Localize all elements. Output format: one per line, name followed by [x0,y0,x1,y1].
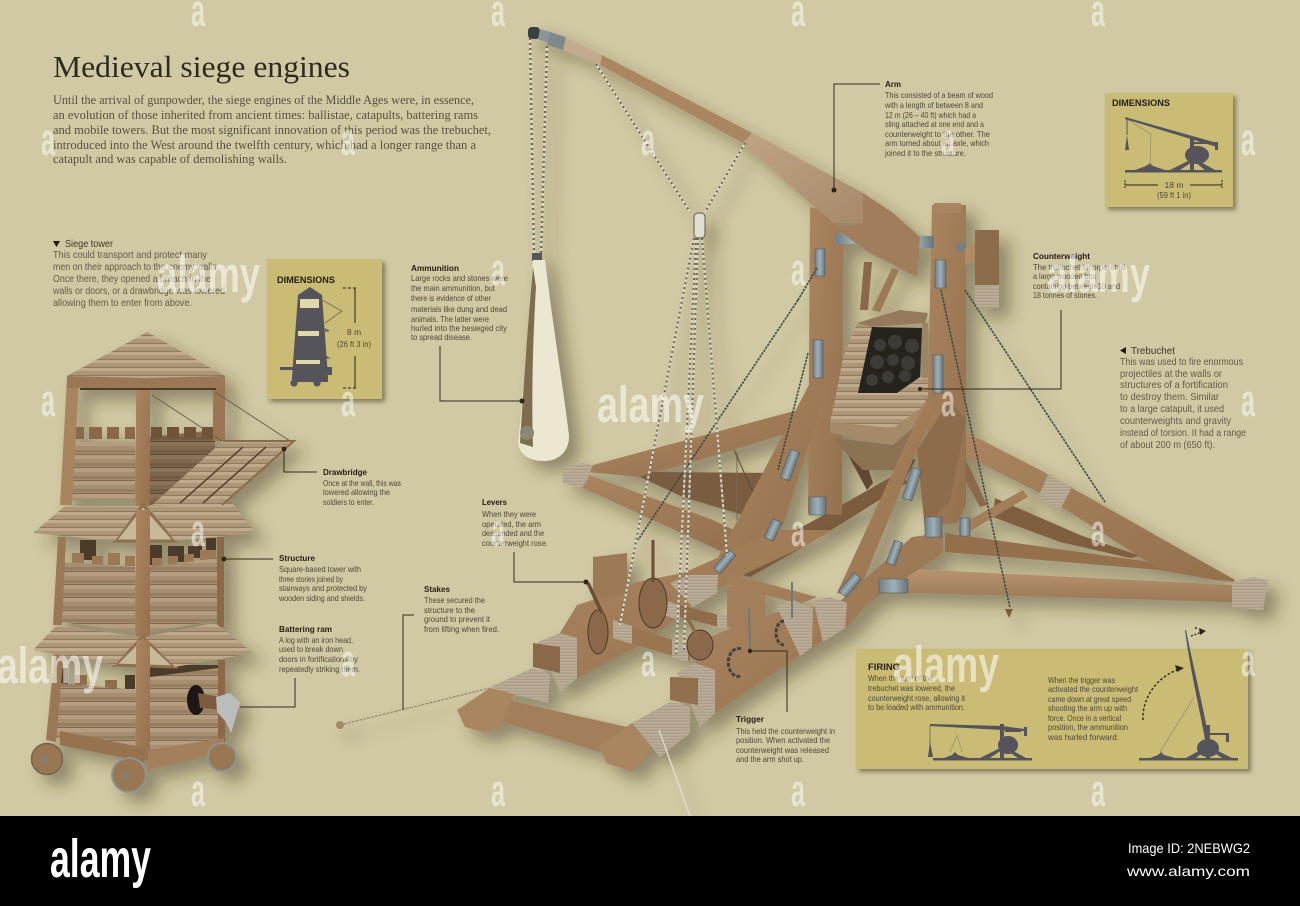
callout: battering ram: Battering ram [279,625,332,634]
callout: ammunition: there is evidence of other [411,293,491,303]
callout: levers: descended and the [482,528,544,538]
callout: trigger: Trigger [736,715,765,724]
panel: trebuchet dimensions: (59 ft 1 in) [1157,190,1191,200]
battering ram [187,685,240,733]
pull ropes [596,64,745,655]
callout: drawbridge [282,447,401,507]
illustration: siege tower [32,332,294,792]
callout: arm: sling attached at one end and a [885,119,984,129]
watermark: large alamy marks: alamy [893,636,999,693]
dimension line: 18 m [1125,180,1222,189]
watermark: large alamy marks: alamy [1047,246,1150,303]
callout: structure: three stories joined by [279,574,344,584]
watermark: small a marks: a [941,114,956,165]
watermark: small a marks: a [491,244,506,295]
callout: drawbridge: lowered allowing the [323,487,390,497]
text: arm lowered [868,673,966,712]
text: arm lowered: counterweight rose, allowing it [868,693,966,703]
watermark: small a marks: a [191,765,206,816]
panel: firing: FIRING [868,662,900,672]
middle storey [33,503,255,640]
watermark: large alamy marks: alamy [597,376,704,433]
panel: tower dimensions: 8 m [347,327,361,337]
callout: counterweight: a large wooden box [1033,271,1097,281]
callout: counterweight [918,252,1125,391]
title: Medieval siege engines [53,49,350,84]
callout: ammunition: materials like dung and dead [411,304,507,314]
trebuchet text block: projectiles at the walls or [1120,369,1222,380]
arrow: projectile [1191,627,1206,636]
arrow: firing trajectory [1143,665,1184,720]
sling ropes [530,38,547,256]
text: trigger activated: When the trigger was [1048,675,1115,685]
callout: levers [482,498,588,584]
callout: arm: Arm [885,80,901,89]
callout: trigger [736,649,835,764]
sling rope twist [530,38,547,256]
text: trigger activated: shooting the arm up with [1048,703,1127,713]
trebuchet text block: This was used to fire enormous [1120,357,1243,368]
watermark: large alamy marks: alamy [157,246,260,303]
diagonal struts [713,365,966,612]
base right rail [695,580,880,727]
image id: Image ID: 2NEBWG2 [1128,840,1250,856]
callout: levers: Levers [482,498,507,507]
base left rail [560,530,833,678]
callout: arm: counterweight to the other. The [885,129,990,139]
uprights on base [593,553,765,630]
trebuchet text block: structures of a fortification [1120,380,1228,391]
counterweight box [830,310,928,490]
trebuchet text block: instead of torsion. It had a range [1120,428,1246,439]
icon: trebuchet silhouette [1125,117,1222,172]
dimension line: 8 m [343,288,358,388]
siege tower text block: allowing them to enter from above. [53,298,192,309]
callout: battering ram: doors in fortifications by [279,654,359,664]
callout: structure: stairways and protected by [279,583,368,593]
intro text block: an evolution of those inherited from ancient times: ballistae, catapults, battering rams [53,108,478,122]
arm beam [563,38,920,277]
uprights [808,203,999,527]
pulley [694,213,705,238]
callout: structure: Square-based tower with [279,564,361,574]
trigger mechanisms [728,582,792,676]
watermark: small a marks: a [641,635,656,686]
callout: arm: arm turned about an axle, which [885,138,989,148]
watermark: small a marks: a [941,375,956,426]
callout: trigger: counterweight was released [736,745,829,755]
rear left frame [563,410,907,577]
trebuchet text block: to destroy them. Similar [1120,392,1219,403]
callout: drawbridge: Once at the wall, this was [323,478,401,488]
text: trigger activated [1047,675,1139,742]
intro text block: and mobile towers. But the most significant innovation of this period was the trebuchet, [53,123,491,137]
siege tower text block: walls or doors, or a drawbridge was lowered [52,286,225,297]
callout: battering ram: A log with an iron head, [279,635,353,645]
pull rope twist [596,64,745,655]
lower storey [33,623,253,770]
callout: ammunition: Ammunition [411,264,459,273]
callout: drawbridge: Drawbridge [323,468,367,477]
callout: arm: joined it to the structure. [884,148,966,158]
watermark: small a marks: a [1241,375,1256,426]
siege tower text block: Once there, they opened a breach in the [53,274,211,285]
callout: trigger: and the arm shot up. [736,754,804,764]
text: arm lowered: When the arm of the [868,673,933,683]
siege tower text block: This could transport and protect many [53,250,208,261]
footer logo: alamy [50,829,151,889]
text: arm lowered: to be loaded with ammunition. [868,702,965,712]
trebuchet text block: Trebuchet [1131,346,1175,357]
rear right frame [880,425,1268,610]
intro text block: introduced into the West around the twelfth century, which had a longer range than a [53,138,476,152]
panel: firing [856,627,1248,769]
callout: stakes: ground to prevent it [424,614,491,624]
watermark: small a marks: a [491,765,506,816]
callout: arm [832,80,993,192]
text: trigger activated: position, the ammunition [1048,722,1128,732]
callout: stakes: structure to the [424,605,475,615]
callout: ammunition: to spread disease. [411,332,472,342]
front cross beam [497,698,627,752]
siege tower text block [52,239,225,309]
callout: battering ram: used to break down [279,644,343,654]
callout: arm: This consisted of a beam of wood [885,90,993,100]
footer bar [0,816,1300,906]
callout: ammunition [411,264,524,404]
sling pouch [518,253,569,461]
chains [638,268,1105,608]
callout: trigger: This held the counterweight in [736,726,835,736]
hook at chain end [1005,609,1013,618]
watermark: small a marks: a [341,635,356,686]
callout: drawbridge: soldiers to enter. [323,497,374,507]
callout: stakes [403,585,499,710]
website: www.alamy.com [1126,863,1250,879]
watermark: small a marks: a [791,765,806,816]
callout: battering ram: repeatedly striking them. [279,664,360,674]
illustration: trebuchet [336,27,1268,816]
intro text block: catapult and was capable of demolishing walls. [53,152,287,166]
watermark: small a marks: a [341,375,356,426]
trebuchet text block: counterweights and gravity [1120,416,1232,427]
trebuchet text block: of about 200 m (650 ft). [1120,440,1215,451]
watermark: small a marks: a [1241,114,1256,165]
callout: ammunition: hurled into the besieged city [411,323,508,333]
siege tower text block: Siege tower [65,239,113,250]
callout: ammunition: the main ammunition, but [411,283,496,293]
callout: trigger: position. When activated the [736,735,830,745]
callout: counterweight: 18 tonnes of stones. [1033,290,1097,300]
watermark: small a marks: a [41,375,56,426]
stake rope front [659,730,690,816]
text: trigger activated: force. Once in a vertical [1048,713,1121,723]
icon: firing trebuchet [1139,630,1238,760]
wheels [32,743,236,792]
callout: counterweight: The trebuchet incorporated [1033,262,1125,272]
drawbridge [152,392,294,505]
panel: tower dimensions [267,259,382,399]
callout: levers: operated, the arm [482,519,541,529]
arm iron tip [528,27,566,50]
cross beam between rails [727,573,817,604]
callout: levers: counterweight rose. [482,538,548,548]
lashings and raised blocks [457,575,847,772]
watermark: large alamy marks [0,246,1150,694]
watermark: small a marks: a [641,114,656,165]
watermark: large alamy marks: alamy [0,637,103,694]
watermark: small a marks: a [791,244,806,295]
stake rope left [336,688,490,729]
watermark: small a marks: a [1241,635,1256,686]
icon: lowered trebuchet [928,724,1032,760]
callout: battering ram [240,625,360,707]
panel: tower dimensions: (26 ft 3 in) [337,339,371,349]
intro text block: Until the arrival of gunpowder, the siege engines of the Middle Ages were, in essence, [53,93,474,107]
callout: stakes: These secured the [424,595,485,605]
callout: structure [222,554,368,603]
callout: stakes: from lifting when fired. [424,624,499,634]
text: trigger activated: came down at great speed [1048,694,1131,704]
text: trigger activated: was hurled forward. [1047,732,1119,742]
watermark: small a marks: a [491,505,506,556]
callout: arm: with a length of between 8 and [884,100,983,110]
callout: levers: When they were [482,509,536,519]
panel: tower dimensions: DIMENSIONS [277,275,335,285]
callout: arm: 12 m (26 – 40 ft) which had a [885,110,976,120]
icon: tower silhouette [280,287,342,387]
callout: ammunition: Large rocks and stones were [411,273,508,283]
watermark: small a marks: a [341,114,356,165]
callout: ammunition: animals. The latter were [411,314,489,324]
panel: trebuchet dimensions: 18 m [1164,180,1184,190]
watermark: small a marks: a [41,114,56,165]
watermark: small a marks: a [791,505,806,556]
callout: counterweight: containing between 10 and [1033,281,1120,291]
intro text block [53,93,491,166]
trebuchet text block: to a large catapult, it used [1120,404,1224,415]
panel: trebuchet dimensions [1105,93,1233,207]
callout: counterweight: Counterweight [1033,252,1090,261]
callout: stakes: Stakes [424,585,450,594]
watermark: small a marks: a [1091,505,1106,556]
siege tower text block: men on their approach to the enemy walls. [53,262,219,273]
watermark: small a marks: a [1091,765,1106,816]
callout: structure: wooden siding and shields. [278,593,365,603]
text: arm lowered: trebuchet was lowered, the [868,683,955,693]
upper storey [60,332,225,506]
trebuchet text block [1120,346,1246,451]
axle [836,234,966,252]
text: trigger activated: activated the counterweight [1048,684,1139,694]
winch: drums, axles and levers [588,540,727,662]
iron plates [713,249,970,597]
panel: trebuchet dimensions: DIMENSIONS [1112,98,1170,108]
watermark: small a marks: a [191,505,206,556]
callout: structure: Structure [279,554,315,563]
